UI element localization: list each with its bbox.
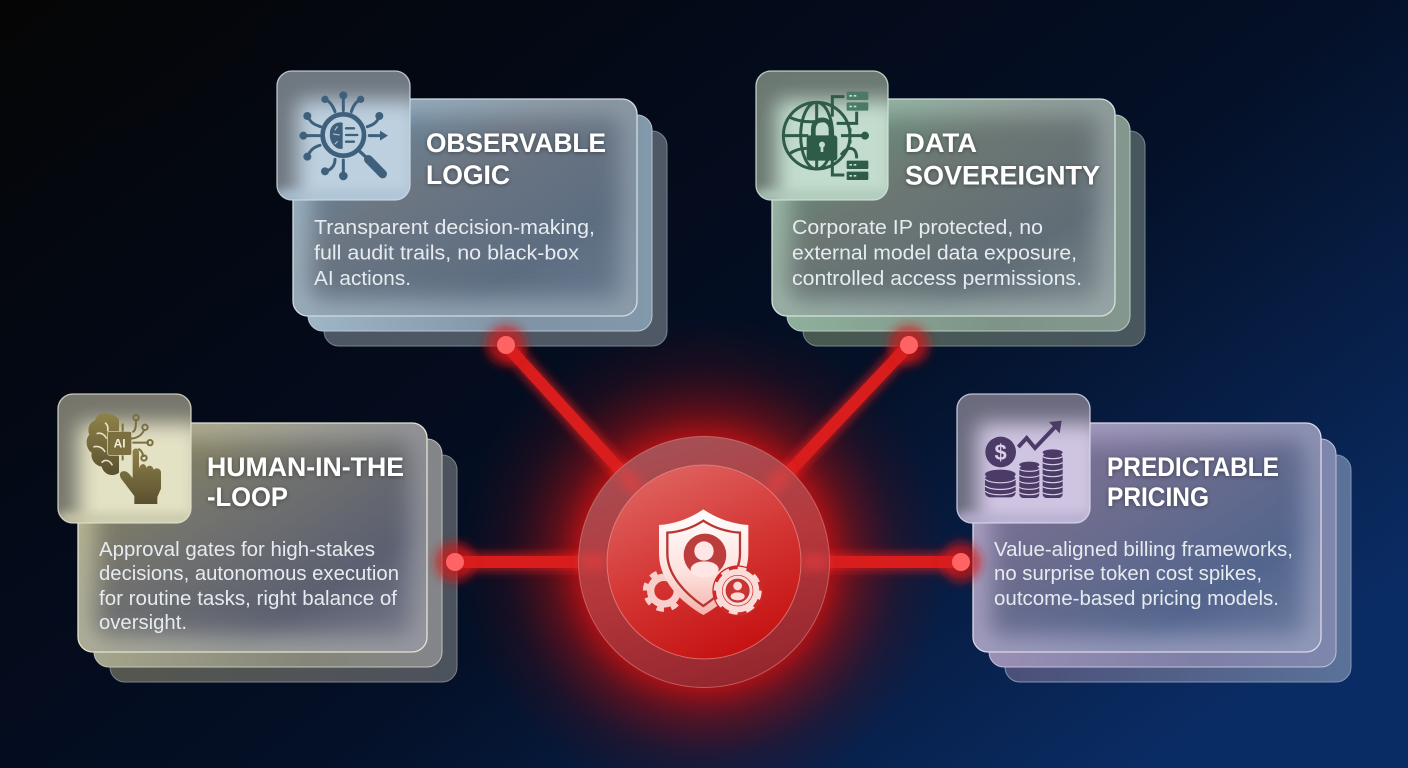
icon tile	[755, 70, 889, 201]
heading	[426, 128, 606, 190]
body text: AI actions.	[314, 268, 411, 290]
heading: HUMAN-IN-THE	[207, 452, 404, 482]
central red glow	[459, 317, 949, 768]
icon: coins and rising arrow	[985, 421, 1063, 498]
connector lines	[455, 345, 961, 562]
middle layer	[94, 439, 442, 667]
right gear	[712, 565, 763, 616]
body text: Value-aligned billing frameworks,	[994, 539, 1293, 561]
body text: outcome-based pricing models.	[994, 588, 1279, 610]
inner disc	[607, 465, 801, 659]
body text: Corporate IP protected, no	[792, 217, 1043, 239]
icon: globe, padlock and servers	[783, 92, 869, 180]
heading	[905, 128, 1100, 190]
outer ring	[578, 436, 830, 688]
body text: controlled access permissions.	[792, 268, 1082, 290]
body text	[314, 217, 595, 290]
panel: human-in-the-loop	[58, 394, 457, 682]
back layer	[1005, 455, 1351, 682]
main card	[293, 99, 637, 316]
panel: data sovereignty	[756, 71, 1145, 346]
body text: for routine tasks, right balance of	[99, 588, 397, 610]
central hub	[578, 436, 830, 688]
body text: Transparent decision-making,	[314, 217, 595, 239]
body text: full audit trails, no black-box	[314, 242, 579, 264]
heading: SOVEREIGNTY	[905, 160, 1100, 190]
back layer	[110, 455, 457, 682]
middle layer	[989, 439, 1336, 667]
heading: OBSERVABLE	[426, 128, 606, 158]
heading: LOGIC	[426, 160, 510, 190]
heading	[1107, 452, 1279, 512]
icon: shield with person and gears	[645, 509, 763, 616]
person badge	[684, 534, 726, 577]
body text	[792, 217, 1082, 290]
body text: Approval gates for high-stakes	[99, 539, 375, 561]
body text: decisions, autonomous execution	[99, 563, 399, 585]
back layer	[803, 131, 1145, 346]
heading	[207, 452, 404, 512]
body text: external model data exposure,	[792, 242, 1077, 264]
left gear	[645, 572, 683, 609]
icon tile	[956, 393, 1091, 524]
back layer	[324, 131, 667, 346]
icon tile	[276, 70, 411, 201]
body text: no surprise token cost spikes,	[994, 563, 1262, 585]
middle layer	[787, 115, 1130, 331]
heading: PREDICTABLE	[1107, 452, 1279, 482]
line bleed through ring	[580, 470, 828, 562]
icon: magnifier over brain with network	[299, 91, 388, 180]
connector nodes	[435, 325, 981, 582]
heading: PRICING	[1107, 482, 1209, 512]
middle layer	[308, 115, 652, 331]
icon: AI brain and pointing hand	[87, 413, 161, 504]
icon: coins and rising arrow: $	[995, 440, 1007, 465]
panel: predictable pricing	[957, 394, 1351, 682]
main card	[772, 99, 1115, 316]
shield	[659, 509, 748, 615]
main card	[973, 423, 1321, 652]
main card	[78, 423, 427, 652]
icon tile	[57, 393, 192, 524]
heading: -LOOP	[207, 482, 288, 512]
icon: AI brain and pointing hand: AI	[114, 437, 126, 451]
body text: oversight.	[99, 612, 187, 634]
body text	[994, 539, 1293, 610]
body text	[99, 539, 399, 634]
panel: observable logic	[277, 71, 667, 346]
heading: DATA	[905, 128, 977, 158]
